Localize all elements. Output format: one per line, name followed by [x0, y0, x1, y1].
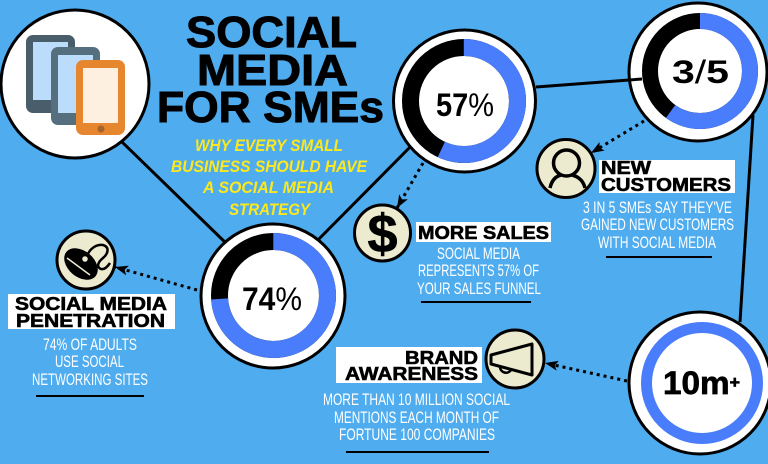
icon: dollar: $	[367, 204, 398, 264]
label: brand awareness: BRAND	[405, 347, 478, 368]
label: social media penetration	[8, 293, 175, 331]
subtitle: BUSINESS SHOULD HAVE	[171, 157, 368, 176]
donut: 10m+	[629, 312, 768, 454]
text: new customers body: WITH SOCIAL MEDIA	[598, 234, 716, 252]
text: brand awareness body	[323, 391, 510, 444]
text: penetration body	[32, 336, 148, 389]
dotted arrow: 57% to more sales	[397, 163, 423, 208]
label: social media penetration: SOCIAL MEDIA	[15, 293, 167, 314]
title: SOCIAL	[186, 8, 357, 57]
text: more sales body: YOUR SALES FUNNEL	[417, 280, 541, 298]
donut: 10m+: 10m	[663, 365, 727, 401]
title: MEDIA	[197, 46, 348, 95]
label: brand awareness: AWARENESS	[345, 363, 478, 384]
title	[157, 8, 384, 132]
connector lines	[120, 115, 753, 322]
donut: 74%	[201, 224, 345, 368]
label: social media penetration: PENETRATION	[16, 310, 165, 331]
subtitle: STRATEGY	[229, 200, 311, 219]
icon: mouse	[57, 231, 115, 289]
text: brand awareness body: FORTUNE 100 COMPANIES	[339, 426, 495, 444]
text: more sales body	[417, 245, 541, 298]
title: FOR SMEs	[157, 83, 384, 132]
icon: megaphone	[486, 330, 544, 388]
label: brand awareness	[336, 347, 482, 384]
subtitle: A SOCIAL MEDIA	[202, 178, 334, 197]
subtitle	[171, 136, 368, 219]
donut: 10m+: +	[730, 373, 740, 392]
text: new customers body	[581, 199, 734, 252]
dotted arrow: 3/5 to new customers	[591, 121, 644, 153]
text: brand awareness body: MORE THAN 10 MILLION SOCIAL	[323, 391, 510, 409]
dotted arrow: 10m+ to brand awareness	[545, 363, 627, 381]
label: more sales: MORE SALES	[418, 222, 549, 243]
donut: 3/5: 3/5	[672, 54, 729, 90]
text: more sales body: REPRESENTS 57% OF	[418, 262, 539, 280]
text: brand awareness body: MENTIONS EACH MONTH OF	[334, 409, 499, 427]
donut: 74%: 74%	[242, 281, 302, 317]
connector line: 57% to 3/5	[536, 79, 642, 87]
text: penetration body: USE SOCIAL	[55, 353, 124, 371]
donut: 57%	[394, 30, 536, 172]
label: new customers: NEW	[601, 157, 652, 178]
dotted arrow: 74% to social media penetration	[115, 267, 197, 290]
icon: dollar	[354, 204, 410, 264]
label: new customers	[599, 157, 735, 195]
text: penetration body: 74% OF ADULTS	[43, 336, 137, 354]
text: penetration body: NETWORKING SITES	[32, 371, 148, 389]
text: more sales body: SOCIAL MEDIA	[437, 245, 520, 263]
donut: 3/5	[629, 3, 767, 141]
subtitle: WHY EVERY SMALL	[195, 136, 343, 155]
label: new customers: CUSTOMERS	[601, 174, 731, 195]
donut: 57%: 57%	[436, 87, 494, 123]
icon: person	[537, 140, 595, 198]
icon: tablets circle	[1, 10, 149, 158]
